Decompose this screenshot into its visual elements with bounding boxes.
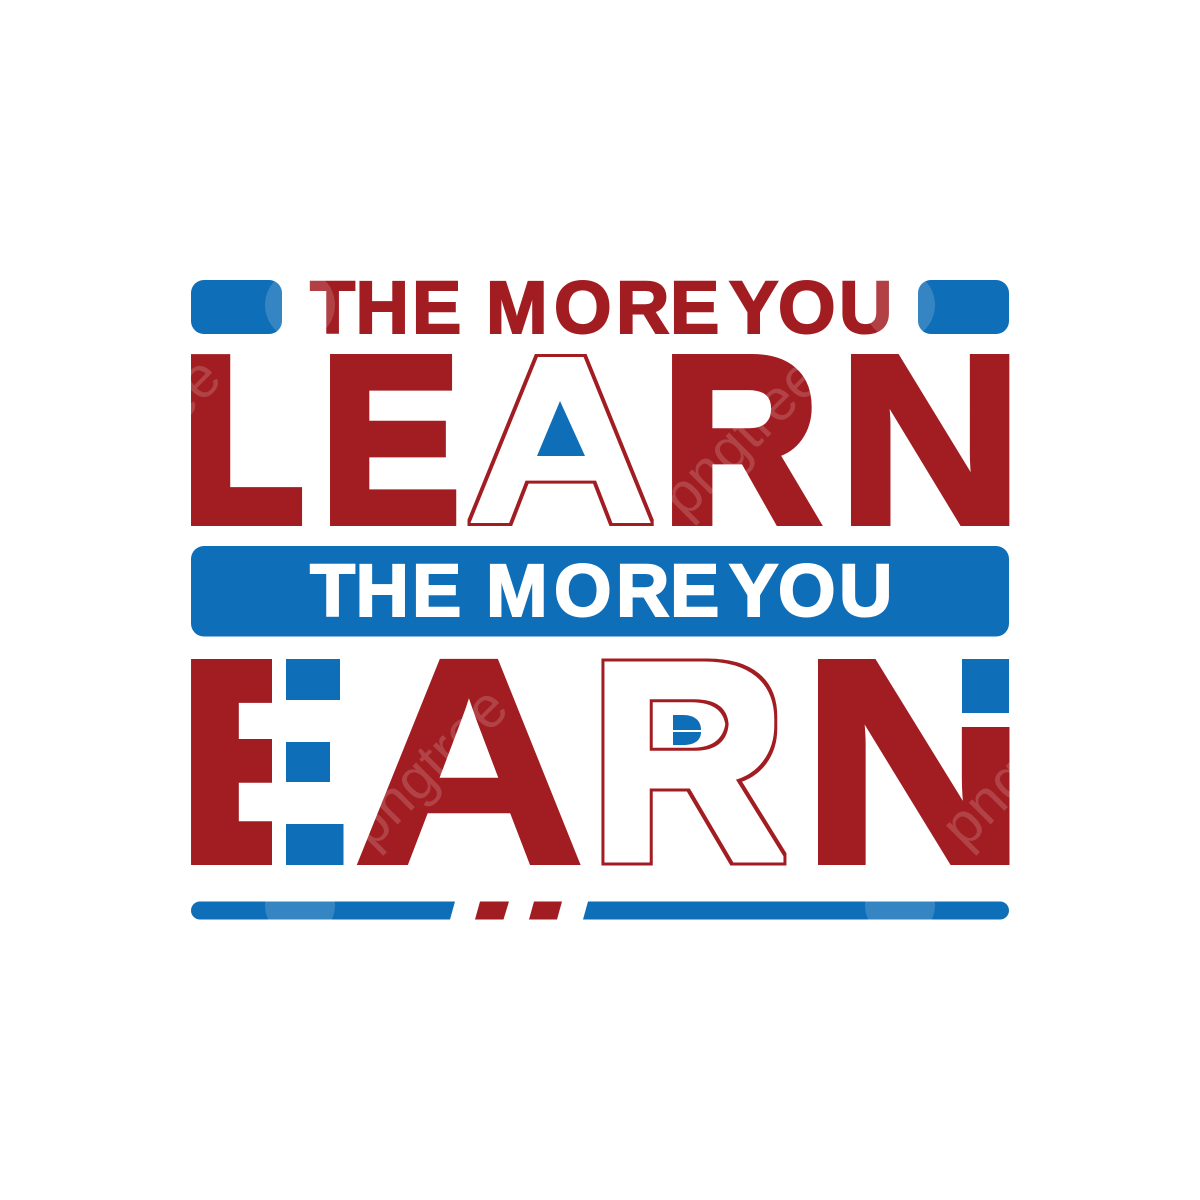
outlined letter A with blue triangle: A <box>464 306 658 575</box>
letter N: N <box>837 305 1024 574</box>
letter L: L <box>184 312 302 569</box>
heading: the more you (red): THE MORE YOU <box>310 266 892 349</box>
letter N with blue block: N <box>801 599 1027 923</box>
top line: pills and heading <box>191 266 1009 349</box>
outlined letter R with blue D mark: R <box>589 603 786 920</box>
bottom divider bar <box>191 902 1009 920</box>
word: LEARN <box>184 305 1024 575</box>
watermark overlay <box>48 270 1113 940</box>
blue banner with white text <box>191 546 1009 636</box>
watermark overlay: pngtree <box>648 344 833 529</box>
word: EARN <box>180 597 1027 926</box>
letter E: E <box>321 309 460 572</box>
left blue pill <box>191 280 282 334</box>
letter E with blue split bars: E <box>180 605 349 919</box>
banner text: the more you (white): THE MORE YOU <box>310 549 892 632</box>
watermark overlay: pngtree <box>335 674 520 859</box>
watermark overlay: pngtree <box>928 674 1113 859</box>
right blue pill <box>918 280 1009 334</box>
letter A: A <box>352 597 586 926</box>
letter R: R <box>662 309 819 572</box>
watermark overlay: pngtree <box>48 344 233 529</box>
